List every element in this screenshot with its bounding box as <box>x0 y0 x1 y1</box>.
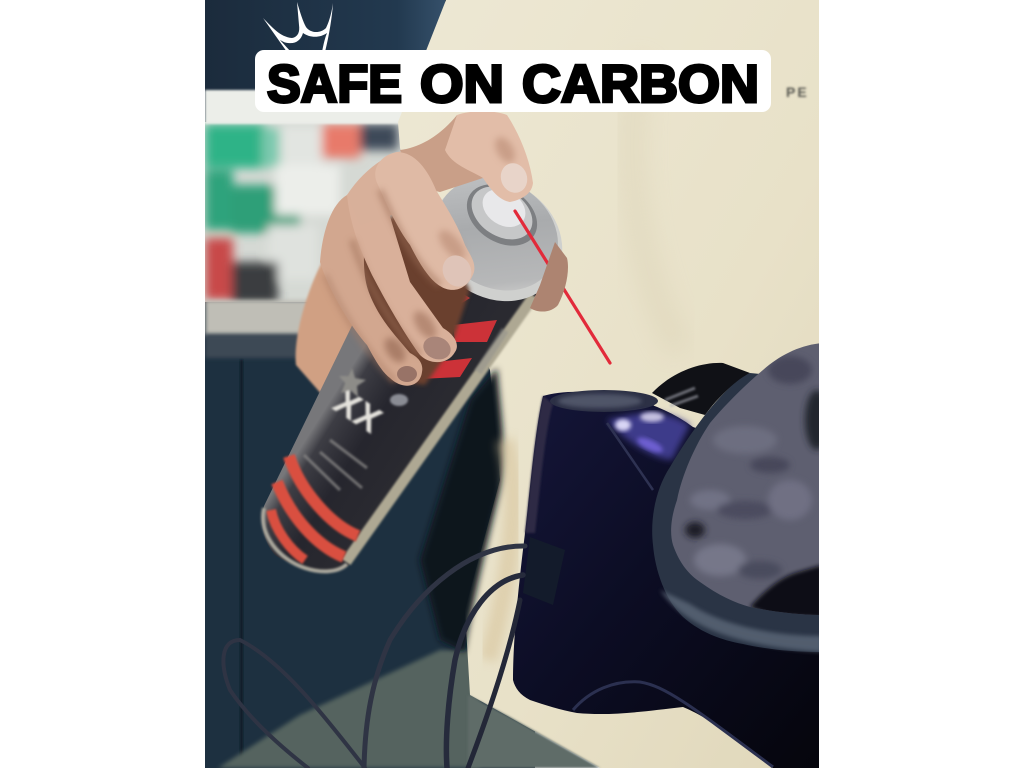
velcro strap <box>523 537 565 605</box>
title banner: CARBON <box>522 55 759 114</box>
finger shading <box>325 134 519 382</box>
shadow between fingers <box>364 215 473 387</box>
thumb nail <box>500 163 528 193</box>
crown logo <box>263 2 333 52</box>
ring finger <box>320 195 422 386</box>
red straw <box>515 211 610 363</box>
shadow between can and shirt <box>420 368 503 652</box>
finger behind can <box>530 242 568 312</box>
title banner: ON <box>420 55 504 114</box>
cables <box>223 546 525 768</box>
logo mark on shirt: PE <box>786 84 809 100</box>
middle finger <box>347 188 457 362</box>
photo: hand spraying a can onto a bike part <box>205 0 819 768</box>
title banner <box>255 50 771 114</box>
can logo XX <box>304 330 505 490</box>
index finger <box>375 152 474 290</box>
bike part <box>513 390 819 768</box>
shirt <box>398 0 819 768</box>
lower red stripes <box>271 456 358 560</box>
upper red stripes <box>462 295 470 302</box>
index nail <box>442 255 472 286</box>
thumb web <box>400 115 483 192</box>
workshop background <box>205 0 535 768</box>
thumb <box>445 111 533 202</box>
can body <box>262 288 536 570</box>
middle nail <box>423 336 451 360</box>
sparkle reflection <box>607 412 690 460</box>
back of hand <box>347 152 402 216</box>
hand <box>320 111 568 386</box>
spray can <box>260 178 562 575</box>
can logo XX: XX <box>327 380 389 441</box>
black sock <box>652 363 750 415</box>
bottom rim <box>263 508 347 571</box>
trousers <box>468 695 600 768</box>
dome <box>442 193 562 302</box>
silver edge highlight <box>346 296 534 562</box>
ring nail <box>397 366 417 382</box>
towel in bike holder <box>652 340 829 652</box>
title banner: SAFE <box>267 55 402 114</box>
arm <box>294 263 352 394</box>
